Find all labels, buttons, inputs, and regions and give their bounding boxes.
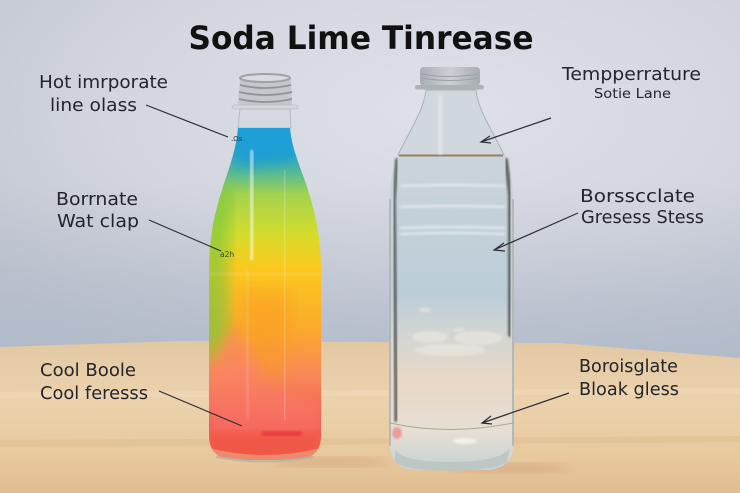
label: hot glass: line olass bbox=[50, 96, 137, 116]
dark edge refractions bbox=[390, 160, 513, 445]
wooden table bbox=[0, 341, 740, 493]
bottle neck and cap threads bbox=[232, 74, 298, 128]
label: bornnate: Wat clap bbox=[57, 212, 139, 232]
water body bbox=[390, 155, 513, 470]
right clear bottle bbox=[390, 67, 513, 471]
label: borsscolate: Borsscclate bbox=[580, 187, 695, 207]
label: temperature: Sotie Lane bbox=[594, 87, 671, 102]
water line bbox=[399, 154, 503, 156]
label: boroisglate: Bloak gless bbox=[579, 380, 679, 400]
label: boroisglate bbox=[482, 357, 679, 424]
label: bornnate: a2h bbox=[220, 250, 234, 259]
label: boroisglate: Boroisglate bbox=[579, 357, 678, 377]
liquid gradient bbox=[209, 128, 321, 460]
label: hot glass bbox=[39, 73, 243, 143]
wall background bbox=[0, 0, 740, 360]
title: Soda Lime Tinrease bbox=[188, 19, 534, 57]
ribs and highlights bbox=[400, 185, 505, 234]
left rainbow bottle bbox=[209, 73, 321, 462]
label: borsscolate: Gresess Stess bbox=[581, 208, 704, 228]
base of bottle bbox=[395, 448, 510, 471]
label: cool boole bbox=[40, 361, 242, 426]
label: hot glass: Hot imrporate bbox=[39, 73, 168, 93]
label: hot glass: .Ωs bbox=[231, 135, 243, 143]
label: bornnate bbox=[56, 190, 234, 259]
pink spot bbox=[392, 427, 402, 439]
label: cool boole: Cool Boole bbox=[40, 361, 136, 381]
foam bubbles bbox=[412, 308, 502, 356]
label: temperature: Tempperrature bbox=[561, 65, 701, 85]
label: bornnate: Borrnate bbox=[56, 190, 138, 210]
label: temperature bbox=[481, 65, 701, 143]
label: cool boole: Cool feresss bbox=[40, 384, 148, 404]
label: borsscolate bbox=[494, 187, 704, 251]
bottle cap bbox=[415, 67, 484, 90]
upper glass shoulder bbox=[398, 90, 504, 155]
